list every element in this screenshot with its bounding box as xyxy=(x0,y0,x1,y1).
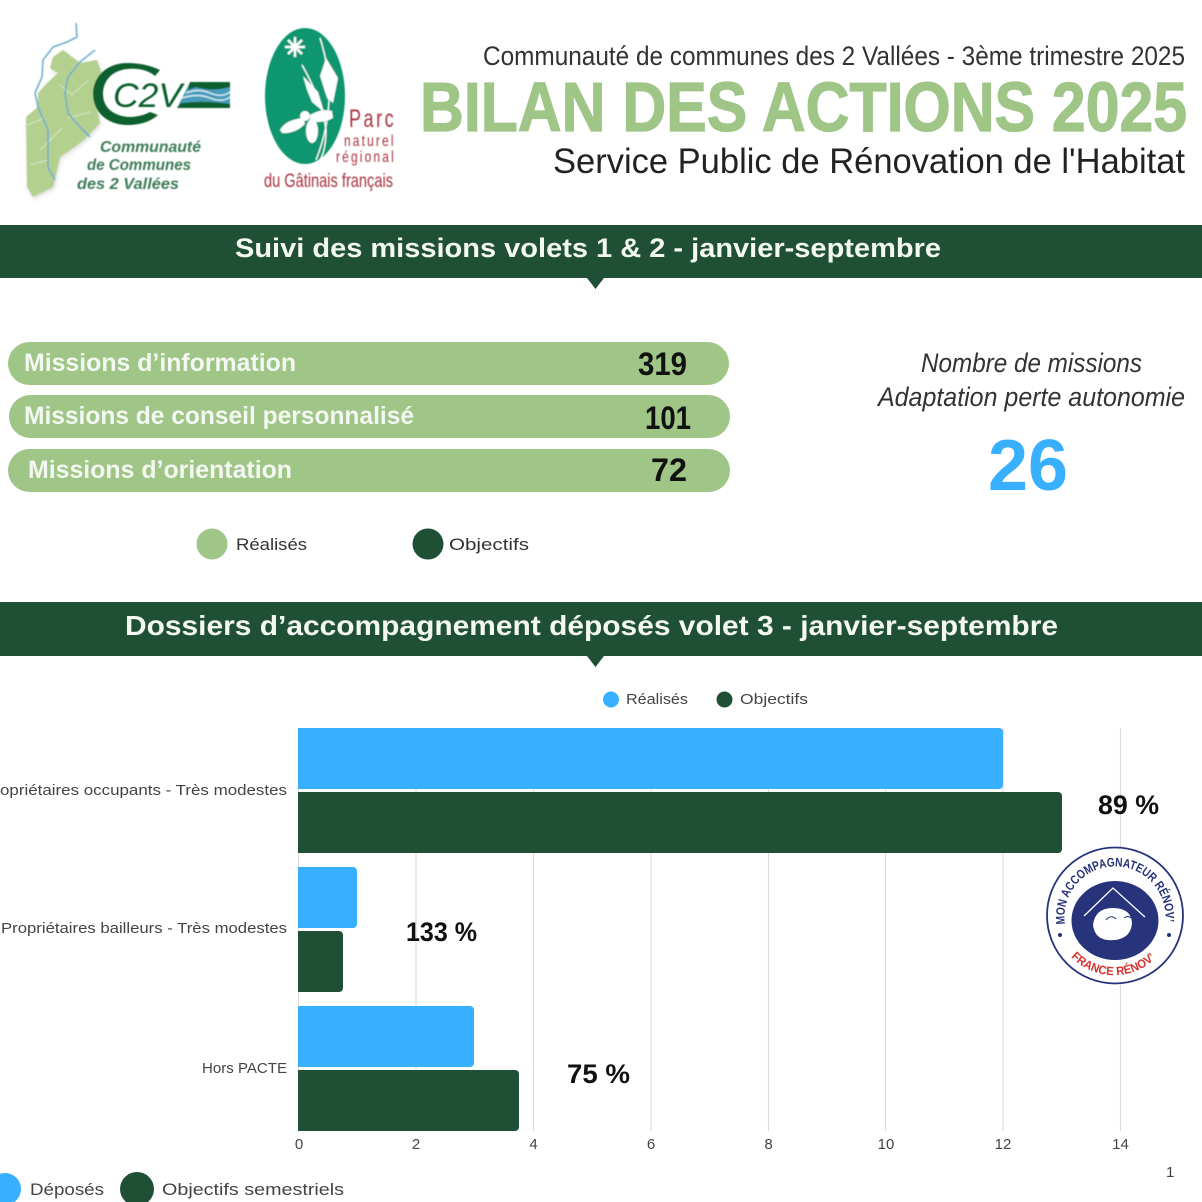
section banner: suivi des missions: Suivi des missions volets 1 & 2 - janvier-septembre xyxy=(235,233,941,263)
logo: Parc naturel régional du Gâtinais français xyxy=(264,28,394,192)
logo: Parc naturel régional du Gâtinais français: régional xyxy=(336,147,394,165)
logo: Communauté de communes des 2 Vallées: de Communes xyxy=(87,157,191,174)
legend: chart bottom: Déposés xyxy=(30,1180,104,1199)
bar: missions d'information: 319 xyxy=(638,346,687,382)
bar: missions de conseil personnalisé: Missions de conseil personnalisé xyxy=(24,402,414,430)
section banner: dossiers d'accompagnement: Dossiers d’accompagnement déposés volet 3 - janvier-septembre xyxy=(125,610,1058,641)
bar chart: dossiers déposés: Hors PACTE xyxy=(202,1060,287,1077)
legend: missions: Réalisés xyxy=(236,535,307,554)
percentage labels: 133 % xyxy=(406,917,477,947)
percentage labels xyxy=(406,790,1159,1089)
bar chart: dossiers déposés xyxy=(0,728,1129,1153)
callout: nombre de missions adaptation perte autonomie xyxy=(876,348,1185,506)
legend: chart top: Objectifs xyxy=(740,691,808,708)
icon: Mon accompagnateur Rénov' badge: FRANCE RÉNOV’ xyxy=(1072,951,1152,976)
logo: Parc naturel régional du Gâtinais français: Parc xyxy=(349,104,394,133)
bar chart: dossiers déposés: 2 xyxy=(412,1136,420,1153)
bar chart: dossiers déposés: 14 xyxy=(1112,1136,1129,1153)
bar: missions d'information xyxy=(8,342,729,385)
legend: missions xyxy=(196,528,529,560)
bar: missions d'information: Missions d’information xyxy=(24,349,296,377)
logo: Parc naturel régional du Gâtinais français: naturel xyxy=(344,131,394,149)
bar chart: dossiers déposés: opriétaires occupants - Très modestes xyxy=(0,782,287,799)
bar chart: dossiers déposés: 12 xyxy=(995,1136,1011,1153)
logo: Parc naturel régional du Gâtinais français: du Gâtinais français xyxy=(264,171,393,192)
callout: nombre de missions adaptation perte autonomie: 26 xyxy=(988,426,1068,506)
bar chart: dossiers déposés: 6 xyxy=(647,1136,655,1153)
callout: nombre de missions adaptation perte autonomie: Nombre de missions xyxy=(921,348,1142,378)
bar: missions d'orientation: 72 xyxy=(651,452,687,488)
page number: 1 xyxy=(1166,1164,1174,1181)
logo: Communauté de communes des 2 Vallées: Communauté xyxy=(100,139,201,156)
section banner: dossiers d'accompagnement xyxy=(0,602,1202,667)
bar chart: dossiers déposés: 4 xyxy=(529,1136,538,1153)
legend: chart top xyxy=(603,691,808,708)
bar chart: dossiers déposés: 10 xyxy=(878,1136,894,1153)
bar chart: dossiers déposés: 8 xyxy=(764,1136,773,1153)
bar: missions d'orientation: Missions d’orientation xyxy=(28,456,292,484)
bar: missions de conseil personnalisé: 101 xyxy=(645,400,691,436)
bar chart: dossiers déposés: 0 xyxy=(295,1136,303,1153)
percentage labels: 75 % xyxy=(567,1059,630,1089)
bar chart: dossiers déposés: Propriétaires bailleurs - Très modestes xyxy=(1,920,287,937)
bar: missions de conseil personnalisé xyxy=(9,395,730,438)
header text block: Service Public de Rénovation de l'Habitat xyxy=(553,142,1185,181)
logo: Communauté de communes des 2 Vallées: des 2 Vallées xyxy=(77,176,179,193)
legend: missions: Objectifs xyxy=(449,535,529,554)
callout: nombre de missions adaptation perte autonomie: Adaptation perte autonomie xyxy=(876,382,1185,412)
legend: chart bottom: Objectifs semestriels xyxy=(162,1180,344,1199)
icon: Mon accompagnateur Rénov' badge xyxy=(1046,846,1184,984)
legend: chart bottom xyxy=(0,1172,344,1202)
icon: Mon accompagnateur Rénov' badge: MON ACCOMPAGNATEUR RÉNOV’ xyxy=(1056,858,1174,924)
section banner: suivi des missions xyxy=(0,225,1202,289)
bar: missions d'orientation xyxy=(8,449,730,492)
percentage labels: 89 % xyxy=(1098,790,1159,820)
legend: chart top: Réalisés xyxy=(626,691,688,708)
header text block xyxy=(420,41,1187,181)
logo: Communauté de communes des 2 Vallées: C2V xyxy=(113,77,185,115)
logo: Communauté de communes des 2 Vallées xyxy=(26,23,230,199)
